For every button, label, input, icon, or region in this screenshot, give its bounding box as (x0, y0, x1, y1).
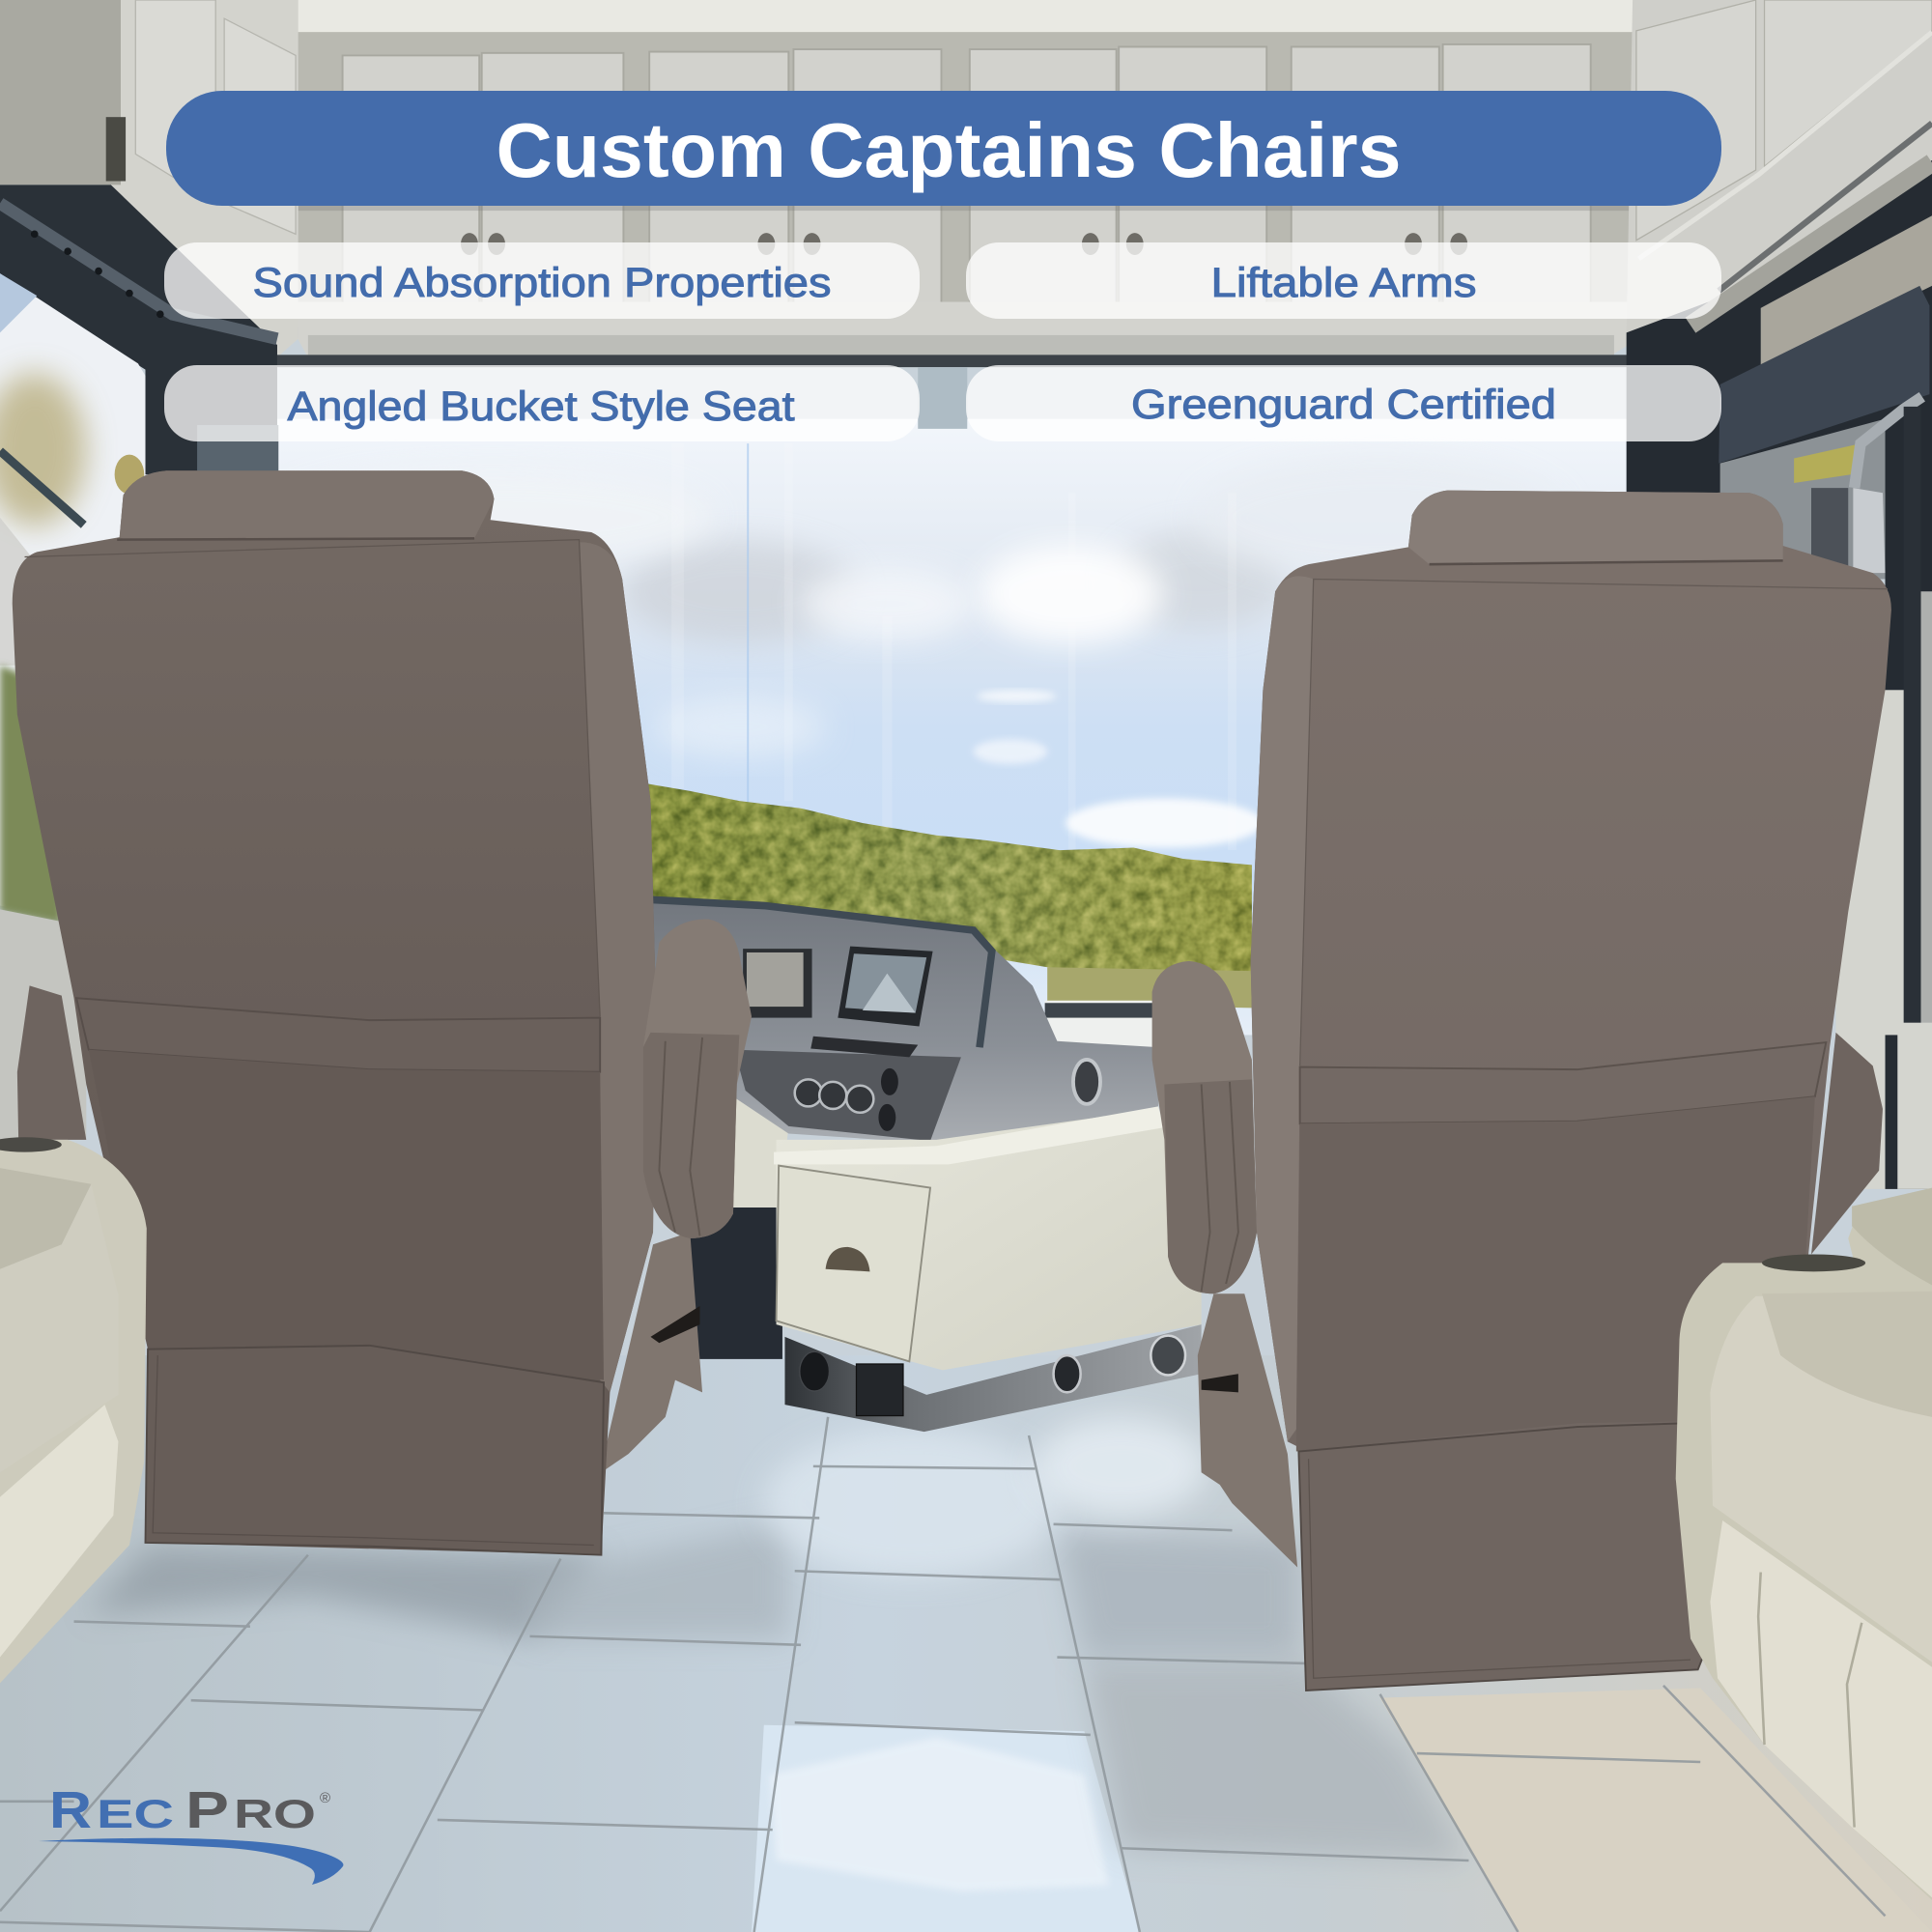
recliner: right foreground (1676, 1188, 1932, 1900)
logo: RecPro: R (49, 1781, 92, 1839)
armrest: left chair (643, 919, 752, 1238)
cream cabinet with drawer (774, 1106, 1202, 1432)
armrest: right chair (1152, 961, 1257, 1293)
logo: RecPro: P (185, 1781, 229, 1839)
title banner: Custom Captains Chairs (497, 107, 1401, 193)
logo: RecPro: RO (234, 1791, 316, 1836)
feature pill: Angled Bucket Style Seat (164, 365, 920, 441)
title banner (166, 91, 1721, 206)
right wall, door and rod (1627, 0, 1932, 1189)
marble floor (0, 1355, 1932, 1932)
logo: RecPro: ® (320, 1790, 330, 1806)
feature pill: Greenguard Certified: Greenguard Certified (1131, 382, 1556, 428)
recliner: left foreground (0, 1137, 147, 1683)
treeline through windshield (647, 783, 1252, 1008)
feature pill: Greenguard Certified (966, 365, 1721, 441)
centre header band (277, 355, 1633, 429)
windshield sky (271, 419, 1638, 1035)
feature pill: Sound Absorption Properties (164, 242, 920, 319)
ceiling and upper cabinets (265, 0, 1658, 357)
feature pill: Sound Absorption Properties: Sound Absorption Properties (253, 260, 831, 306)
logo: RecPro: EC (97, 1791, 174, 1836)
feature pill: Liftable Arms: Liftable Arms (1211, 260, 1476, 306)
feature pill: Angled Bucket Style Seat: Angled Bucket Style Seat (288, 384, 795, 430)
dashboard gap (690, 1202, 782, 1359)
left side window (0, 273, 146, 1140)
chair: left (13, 470, 702, 1555)
logo: RecPro (39, 1781, 343, 1885)
feature pill: Liftable Arms (966, 242, 1721, 319)
dashboard console (647, 899, 1158, 1208)
chair: right (1198, 491, 1891, 1690)
left wall cabinets (0, 0, 298, 474)
